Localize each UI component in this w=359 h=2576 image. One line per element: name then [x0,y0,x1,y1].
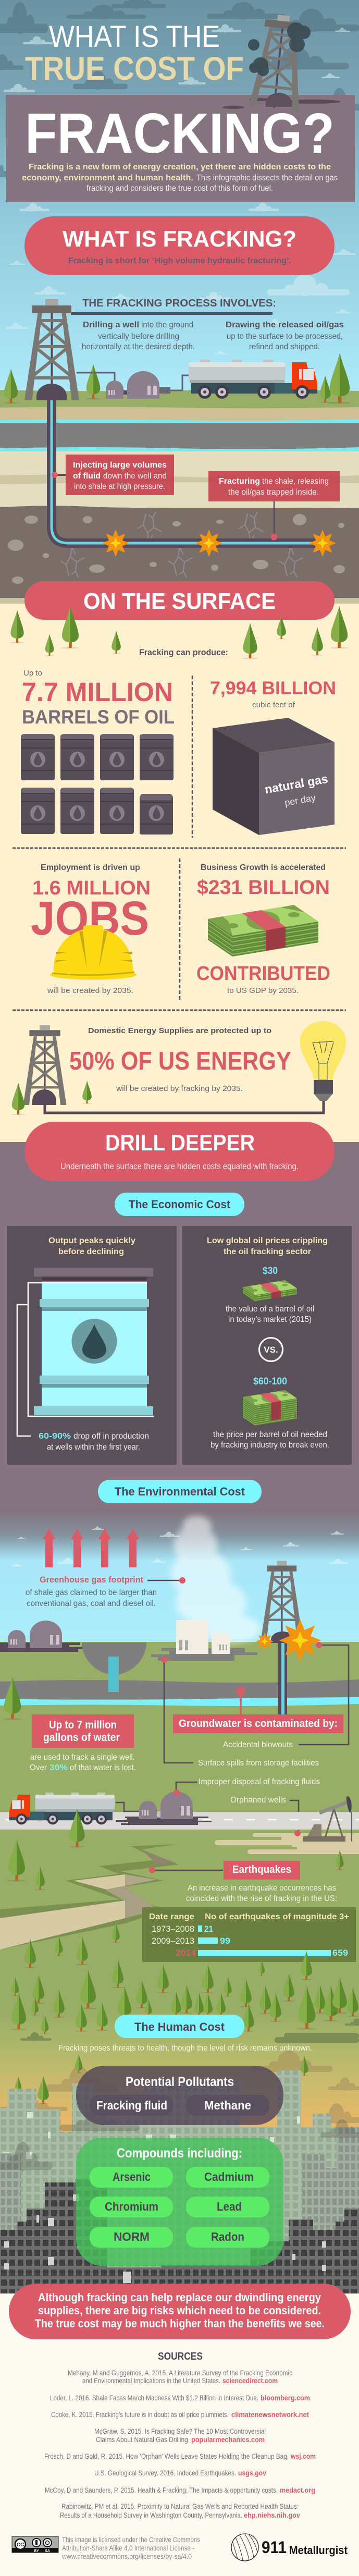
icon: spill domes [116,1789,212,1825]
panel: oil prices: the oil fracking sector [224,1247,311,1256]
title: what is the: WHAT IS THE [49,20,220,54]
panel: oil prices: $30 [263,1266,278,1277]
sources list: Mehany, M and Guggemos, A. 2015. A Literature Survey of the Fracking Economic [68,2369,292,2377]
text: 60-90% drop: at wells within the first year. [47,1443,140,1452]
icon: versus [259,1338,282,1361]
stat: 7,994 billion cubic feet: 7,994 BILLION [210,678,336,698]
background: cream section [0,604,359,1142]
icon: money stack [208,905,318,956]
callout: groundwater contamination [161,1642,349,1833]
panel: compounds: NORM [114,2230,150,2243]
stat: 50% of us energy: will be created by fracking by 2035. [116,1084,243,1093]
panel: compounds: Cadmium [204,2170,254,2184]
chart: earthquake table: 99 [220,1936,230,1946]
chart: earthquake table [142,1907,356,1962]
panel: compounds: Lead [217,2200,242,2213]
panel: oil prices: $60-100 [253,1376,287,1387]
stat: 231 billion: Business Growth is accelerated [201,863,326,872]
panel: earthquakes: An increase in earthquake occurrences has [188,1884,336,1893]
heading pill: on the surface [24,581,335,620]
icon: leaning drilling rig with smoke [248,13,311,111]
panel: potential pollutants [76,2066,283,2125]
callout: fracturing [208,471,340,540]
explosions along pipe [102,530,336,557]
background: environmental sky [0,1486,359,1642]
pill: human cost [115,2015,244,2038]
panel: compounds: Radon [211,2230,244,2243]
intro paragraph: economy, environment and human health. [22,174,193,182]
city: middle layer [0,2110,359,2293]
icon: oil barrels [21,734,174,835]
conclusion pill: The true cost may be much higher than the benefits we see. [35,2317,325,2330]
icon: hard hat [50,925,137,980]
text: licence [61,2536,200,2560]
callout: groundwater contamination: Surface spills from storage facilities [198,1759,319,1768]
text: licence: www.creativecommons.org/licenses/by-sa/4.0 [61,2553,192,2560]
text: drilling a well: into the ground [141,321,193,329]
icon: natural gas cube: per day [284,792,316,808]
stat: 231 billion: CONTRIBUTED [196,963,330,985]
text: licence: This image is licensed under the Creative Commons [62,2536,200,2544]
callout: injecting fluid: into shale at high pressure. [74,482,165,491]
text: greenhouse gas footprint: Greenhouse gas footprint [40,1575,143,1585]
panel: oil prices: in today’s market (2015) [228,1315,312,1324]
intro paragraph: This infographic dissects the detail on gas [196,174,338,182]
sources list: bloomberg.com [261,2394,310,2402]
icon: versus: VS. [264,1345,278,1355]
icon: creative commons badge: SA [45,2549,50,2553]
text: drilling a well: horizontally at the desired depth. [82,342,195,351]
icon: pump jack [294,1796,352,1842]
trees on surface [10,606,349,659]
text: greenhouse gas footprint: conventional gas, coal and diesel oil. [27,1599,156,1608]
stat: 7.7 million barrels [21,669,175,835]
text: drawing the released oil [226,321,344,351]
pill: human cost: The Human Cost [134,2020,225,2033]
tree by water box [3,1677,22,1720]
stat: jobs: JOBS [31,892,149,945]
stat: 7.7 million barrels: BARRELS OF OIL [22,706,175,728]
well pipe [52,396,316,543]
shadows under rig [222,98,341,109]
stat: 231 billion: to US GDP by 2035. [227,986,299,995]
greenhouse arrows [43,1528,139,1567]
text: greenhouse gas footprint: of shale gas claimed to be larger than [26,1588,157,1597]
text: 60-90% drop: drop off in production [73,1432,149,1441]
panel: oil prices: the value of a barrel of oil [226,1305,314,1314]
sources list: Loder, L. 2016. Shale Faces March Madness With $1.2 Billion in Interest Due. [50,2394,258,2402]
icon: white factory [151,1620,257,1661]
callout: water box [30,1714,136,1772]
icon: creative commons badge [12,2536,58,2553]
horizontal dashed divider [13,848,346,849]
panel: oil prices: by fracking industry to break even. [211,1441,329,1450]
sources list: climatenewsnetwork.net [231,2411,309,2419]
intro paragraph: fracking and considers the true cost of this form of fuel. [86,184,273,193]
text: 60-90% drop: 60-90% [39,1432,71,1441]
panel: earthquakes [142,1861,356,1962]
tree before towers [37,2076,49,2104]
smog clouds [0,2018,359,2124]
icon: creative commons badge: BY [34,2549,39,2553]
city: front layer [0,2179,359,2293]
callout: water box: gallons of water [43,1732,120,1744]
sources list: wsj.com [290,2452,316,2460]
background: purple section with sky fade [0,1142,359,1642]
logo: 911 metallurgist: Metallurgist [289,2544,348,2557]
panel: output peaks: Output peaks quickly [48,1236,135,1245]
heading pill: drill deeper: DRILL DEEPER [105,1130,255,1156]
stat: 231 billion: $231 BILLION [197,877,330,899]
heading pill: drill deeper [24,1122,335,1181]
text: drilling a well [82,321,195,351]
icon: natural gas cube: natural gas [264,772,329,796]
sources list: sciencedirect.com [222,2377,278,2385]
panel: compounds [76,2138,283,2266]
stat: jobs: Employment is driven up [41,863,140,872]
header clouds [0,0,359,354]
chart: earthquake table: 21 [204,1924,213,1934]
text: licence: Attribution-Share Alike 4.0 International License - [62,2544,194,2552]
chart: earthquake table: 2014 [176,1948,196,1958]
stat: 50% of us energy: Domestic Energy Supplies are protected up to [88,1026,271,1035]
callout: fracturing: the shale, releasing [262,477,329,486]
hazy trees [15,2054,308,2092]
background: footer [0,2292,359,2576]
heading pill: on the surface: ON THE SURFACE [83,588,276,614]
callout: water box: are used to frack a single well. [30,1753,135,1762]
stat: 50% of us energy [69,1026,291,1093]
text: fracking can produce: Fracking can produce: [139,647,228,657]
callout: water box: Over [30,1763,47,1772]
pill: economic cost [115,1193,244,1216]
panel: potential pollutants: Fracking fluid [96,2099,167,2112]
background: grass field [0,1642,359,2012]
stat: jobs: 1.6 MILLION [32,877,151,899]
sources list: Rabinowitz, PM et al. 2015. Proximity to Natural Gas Wells and Reported Health Status: [61,2503,299,2510]
road band and aquifer [0,1657,359,1706]
intro paragraph: Fracking is a new form of energy creation, yet there are hidden costs to the [29,163,331,171]
icon: light bulb [300,1021,346,1101]
stat: 7,994 billion cubic feet [210,678,336,835]
text: drawing the released oil: up to the surface to be processed, [227,332,343,341]
text: health threats: Fracking poses threats to health, though the level of risk remains unknown. [58,2044,312,2053]
process rule [71,312,273,315]
text: 60-90% drop [39,1432,149,1452]
vertical dashed divider 2 [179,858,180,1000]
sources list: McGraw, S. 2015. Is Fracking Safe? The 10 Most Controversial [94,2427,266,2435]
icon: pit and teal well [82,1642,146,1675]
earthquake fissure [0,1844,179,1949]
icon: tanker truck 2 [9,1793,115,1824]
stat: 7.7 million barrels: Up to [23,669,42,678]
sources list: Results of a Household Survey in Washington County, Pennsylvania. [60,2511,242,2519]
stat: 7,994 billion cubic feet: cubic feet of [252,701,295,709]
chart: barrel with fall-off level [17,1268,154,1436]
callout: groundwater contamination: Improper disposal of fracking fluids [199,1777,320,1786]
icon: creative commons badge: CC [17,2542,24,2548]
sand spill by pumpjack [215,1833,359,1854]
icon: tall money stack [243,1390,297,1426]
chart: earthquake table: 1973–2008 [152,1924,194,1934]
sources list [44,2351,316,2519]
stat: jobs [31,863,151,995]
callout: water box: Up to 7 million [49,1719,117,1731]
panel: earthquakes: coincided with the rise of fracking in the US: [186,1894,337,1903]
text: greenhouse gas footprint [26,1575,185,1608]
chart: earthquake table: No of earthquakes of magnitude 3+ [205,1912,349,1921]
callout: injecting fluid: down the well and [103,472,167,481]
icon: domes with dark spill [0,1621,84,1652]
panel: intro [6,13,355,202]
chart: earthquake table: Date range [149,1912,194,1921]
panel: compounds: Compounds including: [117,2146,242,2161]
panel: earthquakes: Earthquakes [232,1864,291,1875]
sources list: Cooke, K. 2015. Fracking’s future is in doubt as oil price plummets. [51,2411,229,2419]
forest trees [7,1809,344,1968]
background: smoggy horizon [0,2012,359,2293]
panel: compounds: Arsenic [113,2170,151,2184]
pill: environmental cost [98,1480,262,1503]
heading pill: what is fracking: Fracking is short for ‘High volume hydraulic fracturing’. [68,256,291,265]
sources list: SOURCES [158,2351,203,2362]
fracture cracks [60,512,303,578]
sources list: popularmechanics.com [191,2436,265,2444]
text: drawing the released oil: refined and shipped. [249,342,320,351]
title: true cost of: TRUE COST OF [25,51,244,87]
logo: 911 metallurgist [231,2534,348,2561]
environmental clouds [11,1527,348,1566]
callout: groundwater contamination: Groundwater is contaminated by: [179,1718,338,1729]
panel: output peaks: before declining [58,1247,124,1256]
callout: groundwater contamination: Orphaned wells [230,1796,286,1805]
sources list: Claims About Natural Gas Drilling. [96,2436,190,2444]
icon: small money stack [243,1280,297,1302]
text: drilling a well: Drilling a well [83,321,139,329]
stat: 50% of us energy: 50% OF US ENERGY [69,1047,291,1075]
icon: rig with explosions [256,1561,321,1714]
pill: economic cost: The Economic Cost [129,1198,231,1211]
ground layers [0,390,359,604]
heading pill: what is fracking [24,216,335,275]
stat: jobs: will be created by 2035. [47,986,133,995]
sources list: medact.org [280,2486,315,2494]
horizontal dashed divider 2 [13,1009,346,1011]
callout: water box: of that water is lost. [70,1763,136,1772]
heading: process involves: THE FRACKING PROCESS INVOLVES: [82,298,276,309]
rocks in shale [8,514,345,584]
callout: fracturing: Fracturing [219,477,260,486]
vertical dashed divider [192,676,193,838]
panel: oil prices: Low global oil prices crippling [207,1236,328,1245]
stat: 7.7 million barrels: 7.7 MILLION [22,677,173,707]
sources list: ehp.niehs.nih.gov [244,2511,300,2519]
callout: fracturing: the oil/gas trapped inside. [228,488,319,497]
sources list: usgs.gov [238,2469,266,2477]
intro paragraph [22,163,338,193]
callout: injecting fluid [52,455,174,495]
sources list: McCoy, D and Saunders, P. 2015. Health & Fracking: The Impacts & opportunity costs. [45,2486,278,2494]
icon: drilling rig [24,299,79,400]
conclusion pill: Although fracking can help replace our dwindling energy [38,2291,321,2304]
panel: oil prices: the price per barrel of oil needed [213,1430,327,1439]
logo: 911 metallurgist: 911 [262,2538,287,2557]
sources list: U.S. Geological Survey. 2016. Induced Earthquakes. [94,2469,236,2477]
panel: output peaks [7,1226,177,1465]
road [0,1812,359,1830]
chart: earthquake table: 659 [332,1948,348,1958]
conclusion pill: supplies, there are big risks which need to be considered. [38,2304,321,2317]
dense forest [11,1951,359,2034]
panel: compounds: Chromium [105,2200,158,2213]
text: drawing the released oil: Drawing the released oil/gas [226,321,344,329]
callout: injecting fluid: Injecting large volumes [73,461,167,470]
pill: environmental cost: The Environmental Cost [115,1485,245,1498]
conclusion pill [9,2284,351,2339]
callout: water box: 30% [49,1763,68,1772]
city: back layer [0,2070,359,2293]
sources list: Frosch, D and Gold, R. 2015. How ‘Orphan’ Wells Leave States Holding the Cleanup Bag. [44,2452,289,2460]
panel: potential pollutants: Methane [204,2099,251,2112]
heading pill: drill deeper: Underneath the surface there are hidden costs equated with fracking. [60,1162,299,1171]
icon: storage domes and pipes [77,371,190,399]
title: fracking?: FRACKING? [25,102,335,165]
heading pill: what is fracking: WHAT IS FRACKING? [63,226,296,252]
background: sky at top [0,0,359,392]
trees by rig [3,353,351,404]
panel: potential pollutants: Potential Pollutants [126,2075,234,2089]
callout: groundwater contamination: Accidental blowouts [223,1740,293,1749]
energy: rig to bulb [11,1021,346,1115]
icon: tanker truck [189,360,317,399]
chart: earthquake table: 2009–2013 [152,1936,194,1946]
callout: injecting fluid: of fluid [73,472,101,481]
smoke plume [170,1516,261,1643]
icon: natural gas cube [213,718,335,835]
stat: 231 billion [196,863,330,995]
panel: oil prices [182,1226,352,1465]
text: drilling a well: vertically before drilling [98,332,179,341]
sources list: and Environmental Implications in the United States. [82,2377,220,2385]
